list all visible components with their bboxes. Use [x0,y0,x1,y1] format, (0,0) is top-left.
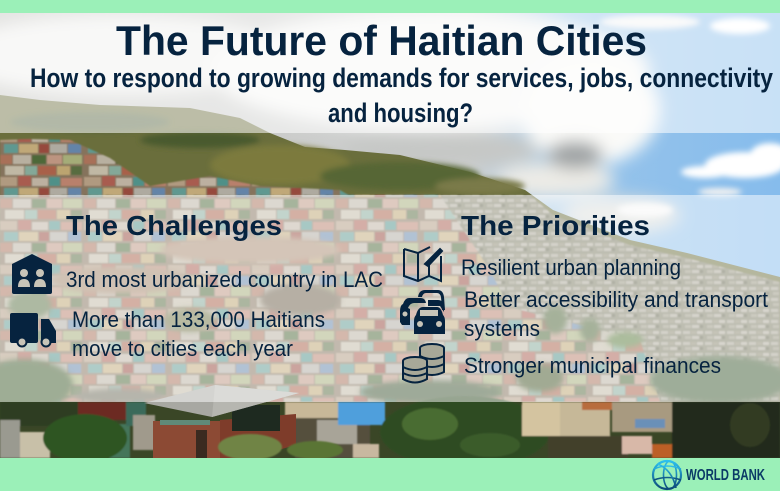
title: The Future of Haitian Cities [116,17,647,64]
bottom green band [0,458,780,491]
front car [414,307,445,334]
panel: the challenges [10,210,383,361]
far houses upper-left cluster [0,139,350,196]
hillside [0,95,780,458]
mid-ground vegetation [0,236,780,411]
translucent top panel [0,13,780,133]
text: finances: Stronger municipal finances [464,353,721,378]
panel: the priorities [400,210,769,382]
translucent content panel [0,195,780,402]
text: urbanized: 3rd most urbanized country in LAC [66,267,383,292]
green hill texture [10,112,525,194]
small clouds right [600,15,780,217]
heading: challenges: The Challenges [66,210,282,241]
text: migration: move to cities each year [72,336,293,361]
city body [0,195,780,402]
foreground foliage [218,434,343,460]
subtitle: and housing? [328,98,473,128]
text: accessibility: systems [464,316,540,341]
icon: globe [653,461,681,489]
right car [428,300,444,312]
text: planning: Resilient urban planning [461,255,681,280]
red building [144,385,299,458]
subtitle [30,63,773,128]
icon: map and pencil [404,247,442,281]
back car [418,290,445,310]
clouds [0,10,680,233]
text: accessibility: Better accessibility and transport [464,287,769,312]
icon: cars [400,290,445,334]
metal roof [144,385,299,417]
text: migration [72,307,325,361]
left car [400,298,426,325]
logo: world bank [653,461,766,489]
icon: truck [10,313,56,346]
text: accessibility [464,287,769,341]
icon: coin stacks [403,344,444,382]
text: migration: More than 133,000 Haitians [72,307,325,332]
top green band [0,0,780,13]
heading: priorities: The Priorities [461,210,650,241]
icon: house with people [12,254,52,294]
foreground bottom strip [0,402,780,458]
